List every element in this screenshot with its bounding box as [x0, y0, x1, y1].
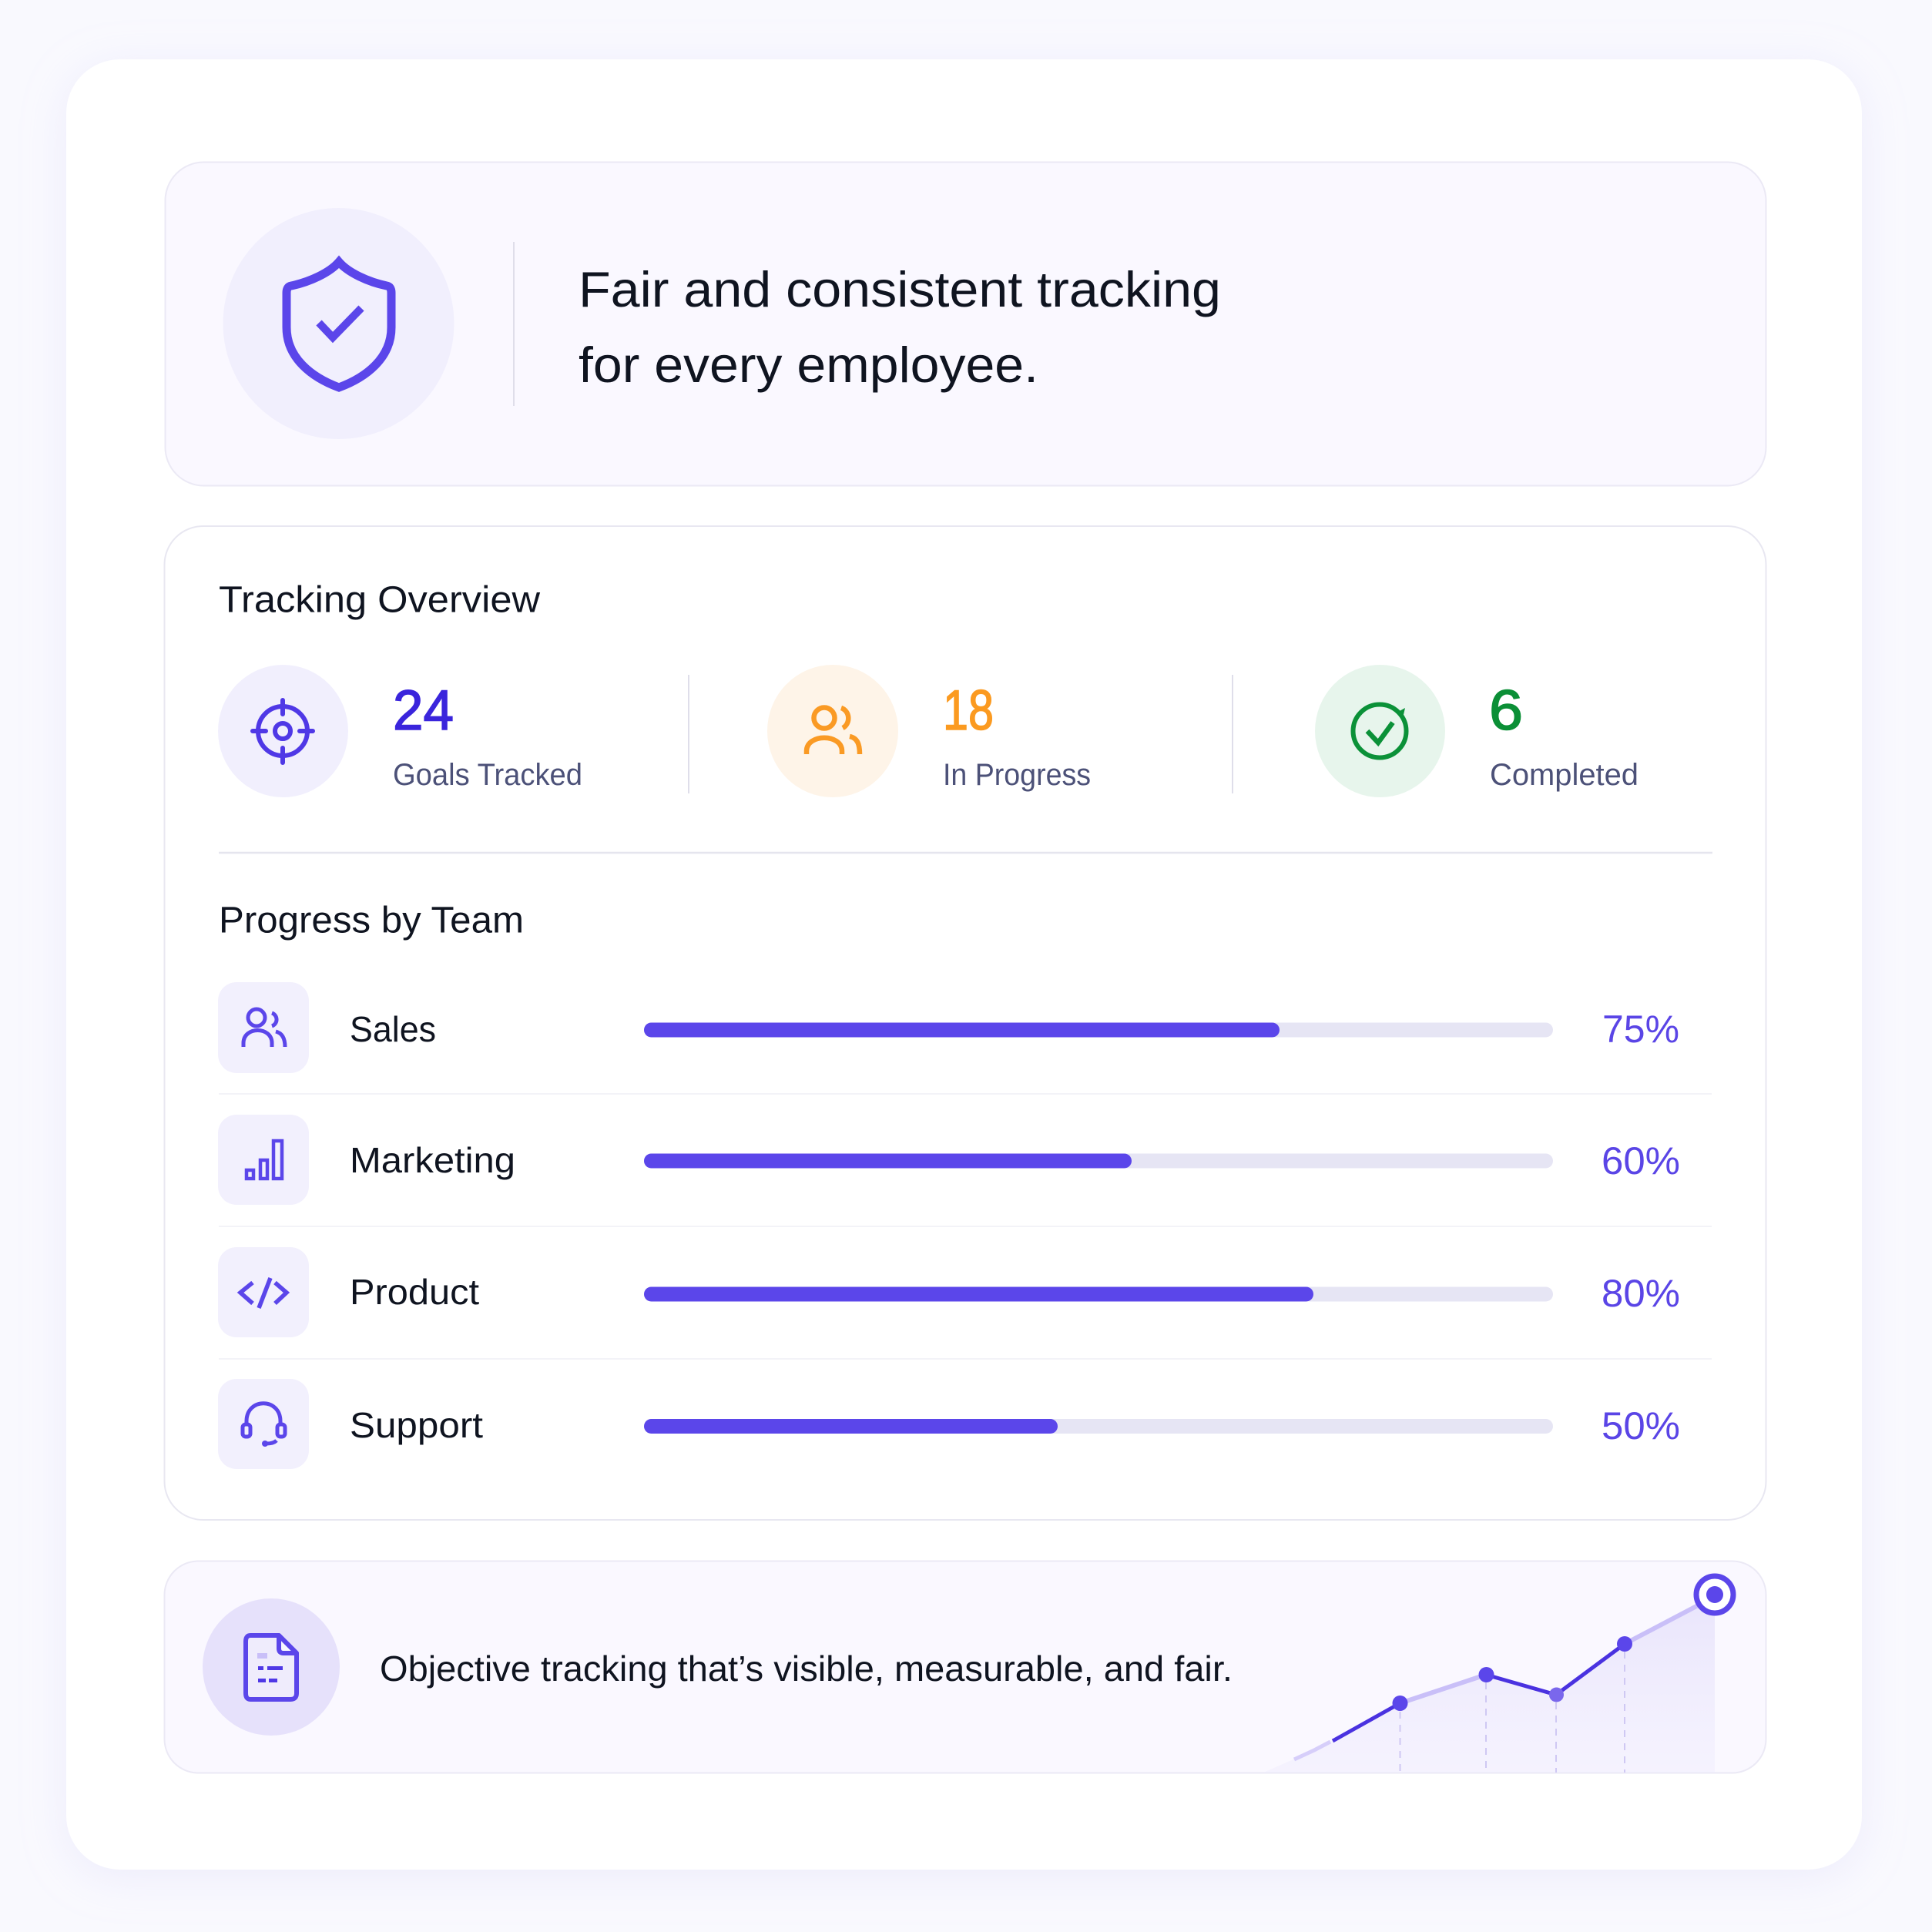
row: support — [218, 1379, 1680, 1469]
row: marketing — [218, 1115, 1680, 1205]
stat: goals tracked — [218, 665, 582, 797]
row: support: Support — [350, 1405, 483, 1445]
stat: goals tracked: Goals Tracked — [393, 758, 582, 792]
stat: in progress: In Progress — [943, 758, 1091, 792]
icon: shield with check — [223, 208, 454, 439]
row: sales — [218, 982, 1679, 1073]
footer text: Objective tracking that’s visible, measurable, and fair. — [380, 1649, 1233, 1689]
icon: document — [203, 1598, 340, 1736]
panel: objective tracking footer — [165, 1561, 1766, 1773]
row: sales: Sales — [350, 1009, 436, 1049]
row: marketing: Marketing — [350, 1140, 515, 1180]
stat: completed — [1233, 665, 1639, 797]
row: product — [218, 1247, 1680, 1337]
heading: tracking overview: Tracking Overview — [219, 579, 540, 621]
line chart: rising trend — [1263, 1576, 1733, 1773]
headline text: Fair and consistent tracking — [579, 261, 1221, 317]
headline text: for every employee. — [579, 337, 1038, 393]
row: sales: 75% — [1602, 1008, 1679, 1051]
stat: in progress: 18 — [943, 679, 994, 742]
headline text — [514, 242, 1221, 406]
stat: completed: 6 — [1489, 679, 1523, 742]
stat: completed: Completed — [1490, 758, 1639, 792]
stat: goals tracked: 24 — [393, 679, 454, 742]
heading: progress by team: Progress by Team — [219, 900, 524, 941]
row: marketing: 60% — [1602, 1139, 1680, 1182]
panel: headline banner — [165, 162, 1766, 485]
row: support: 50% — [1602, 1404, 1680, 1447]
panel: tracking overview and team progress — [165, 526, 1766, 1520]
row: product: 80% — [1602, 1272, 1680, 1315]
stat: in progress — [689, 665, 1091, 797]
row: product: Product — [350, 1272, 479, 1312]
